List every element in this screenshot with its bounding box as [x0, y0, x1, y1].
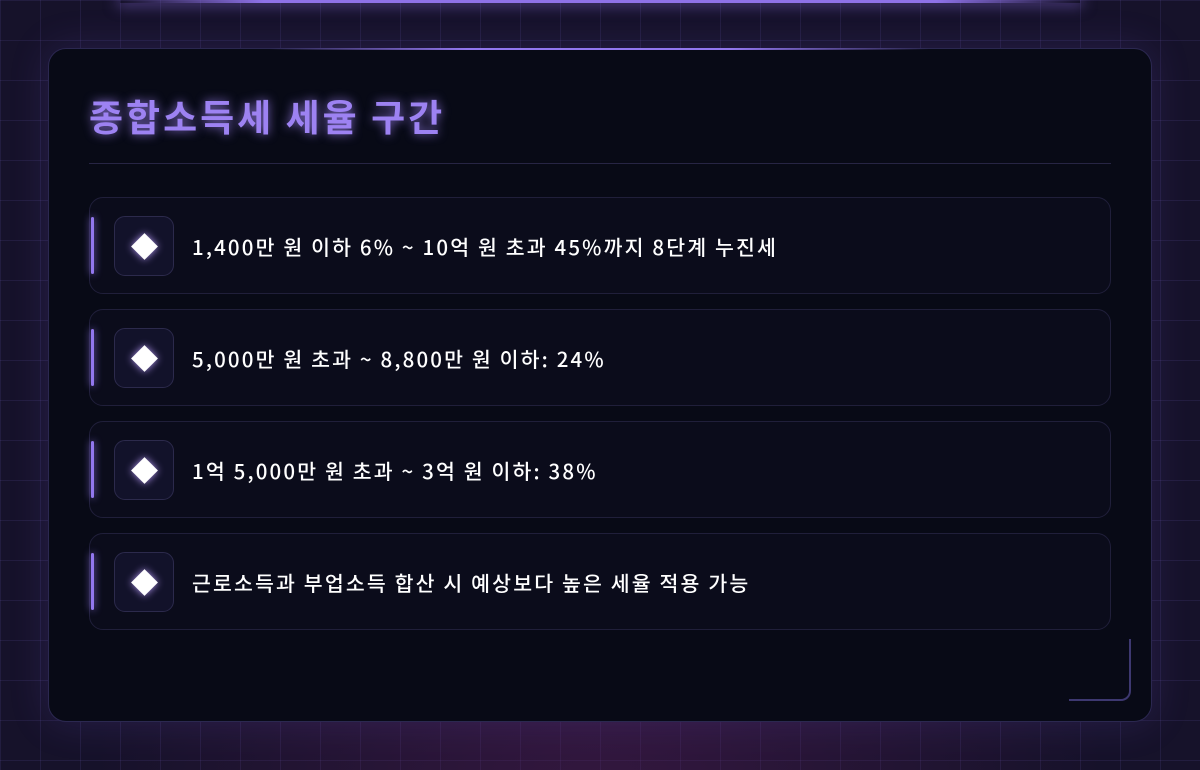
icon: diamond [114, 328, 174, 388]
text: item 2: 5,000만 원 초과 ~ 8,800만 원 이하: 24% [192, 343, 606, 373]
text: item 3: 1억 5,000만 원 초과 ~ 3억 원 이하: 38% [192, 455, 598, 485]
item 3 [89, 421, 1111, 518]
text: item 4: 근로소득과 부업소득 합산 시 예상보다 높은 세율 적용 가능 [192, 567, 750, 597]
icon: diamond [114, 216, 174, 276]
item 4 [89, 533, 1111, 630]
item 1 [89, 197, 1111, 294]
icon: diamond [114, 552, 174, 612]
title: 종합소득세 세율 구간 [89, 88, 445, 142]
text: item 1: 1,400만 원 이하 6% ~ 10억 원 초과 45%까지 8단계 누진세 [192, 231, 778, 261]
item 2 [89, 309, 1111, 406]
icon: diamond [114, 440, 174, 500]
